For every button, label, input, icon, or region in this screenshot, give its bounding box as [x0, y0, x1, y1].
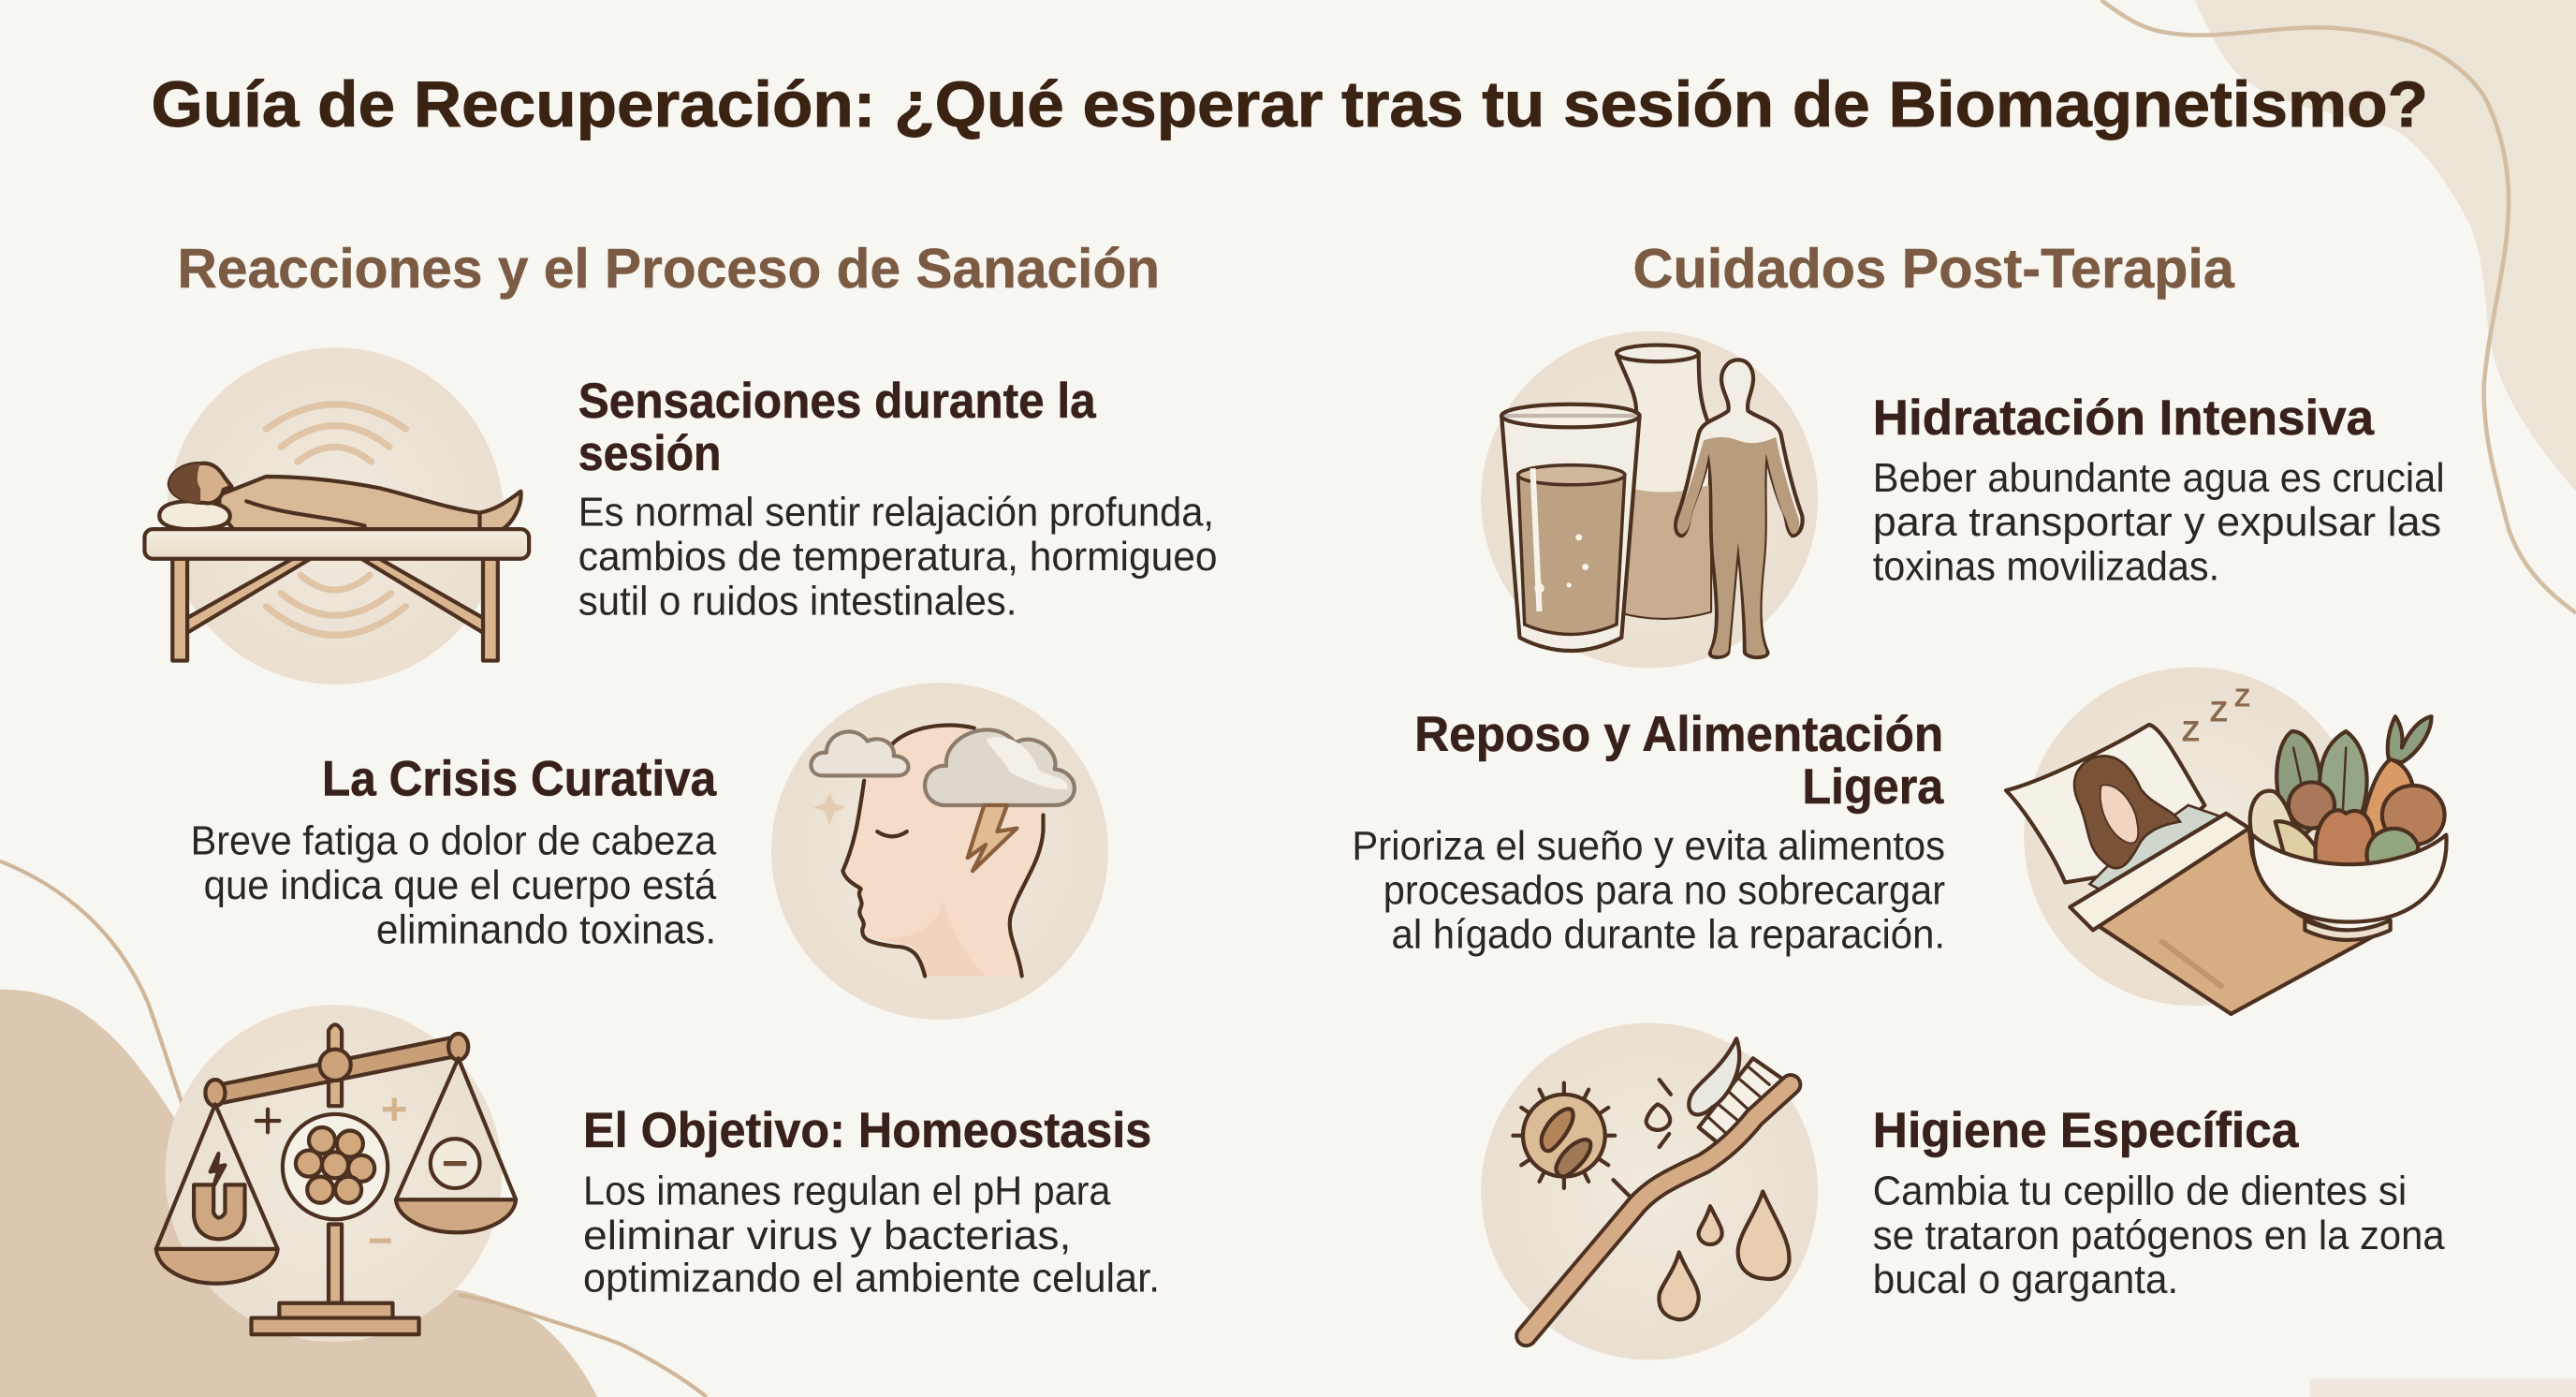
- background line: bottom centre: [459, 1295, 707, 1397]
- panel: rest and diet: [1352, 668, 2447, 1014]
- background line: top right: [2101, 0, 2576, 613]
- text block: hydration: Beber abundante agua es crucial: [1873, 455, 2445, 501]
- text block: rest and diet: Ligera: [1802, 759, 1944, 815]
- text block: sensations: Sensaciones durante la: [578, 374, 1096, 429]
- text block: homeostasis: El Objetivo: Homeostasis: [583, 1103, 1151, 1158]
- text block: sensations: sesión: [578, 426, 721, 481]
- heading: reactions column: Reacciones y el Proceso de Sanación: [178, 237, 1160, 300]
- icon: sleeping person with vegetable bowl: Z: [2210, 694, 2228, 728]
- panel: sensations: [144, 347, 1218, 684]
- text block: hygiene: Higiene Específica: [1873, 1103, 2299, 1158]
- text block: hygiene: se trataron patógenos en la zona: [1873, 1213, 2445, 1258]
- text block: rest and diet: Reposo y Alimentación: [1414, 707, 1943, 762]
- background blob: top right: [2195, 0, 2576, 492]
- panel: hydration: [1481, 331, 2445, 668]
- icon: water glass, carafe and body: [1481, 331, 1818, 668]
- text block: healing crisis: que indica que el cuerpo está: [204, 862, 717, 908]
- text block: hydration: Hidratación Intensiva: [1873, 390, 2375, 446]
- text block: rest and diet: Prioriza el sueño y evita alimentos: [1352, 823, 1945, 869]
- panel: homeostasis: [156, 1005, 1160, 1342]
- text block: homeostasis: optimizando el ambiente celular.: [583, 1255, 1160, 1301]
- text block: hygiene: bucal o garganta.: [1873, 1257, 2178, 1302]
- text block: sensations: cambios de temperatura, hormigueo: [578, 534, 1218, 580]
- background line: bottom left: [0, 861, 183, 1104]
- corner swatch: bottom right: [2310, 1379, 2576, 1397]
- text block: homeostasis: eliminar virus y bacterias,: [583, 1213, 1071, 1258]
- heading: care column: Cuidados Post-Terapia: [1633, 237, 2235, 300]
- text block: homeostasis: Los imanes regulan el pH para: [583, 1168, 1111, 1213]
- text block: hygiene: [1873, 1103, 2445, 1302]
- text block: hydration: [1873, 390, 2445, 590]
- text block: hydration: toxinas movilizadas.: [1873, 544, 2219, 590]
- text block: sensations: sutil o ruidos intestinales.: [578, 578, 1017, 624]
- title: Guía de Recuperación: ¿Qué esperar tras tu sesión de Biomagnetismo?: [151, 68, 2428, 140]
- text block: sensations: [578, 374, 1218, 624]
- icon: toothbrush with germs and drops: [1481, 1023, 1818, 1360]
- text block: healing crisis: eliminando toxinas.: [376, 906, 716, 952]
- text block: rest and diet: procesados para no sobrecargar: [1383, 867, 1945, 913]
- text block: hygiene: Cambia tu cepillo de dientes si: [1873, 1168, 2407, 1213]
- text block: healing crisis: La Crisis Curativa: [322, 751, 717, 806]
- text block: rest and diet: al hígado durante la reparación.: [1392, 912, 1945, 958]
- text block: sensations: Es normal sentir relajación profunda,: [578, 490, 1214, 536]
- text block: healing crisis: [191, 751, 717, 952]
- text block: hydration: para transportar y expulsar las: [1873, 499, 2441, 545]
- text block: homeostasis: [583, 1103, 1160, 1301]
- icon: balance scale: [156, 1005, 516, 1342]
- icon: sleeping person with vegetable bowl: Z: [2182, 714, 2200, 748]
- icon: head with storm clouds: [771, 683, 1108, 1020]
- icon: sleeping person with vegetable bowl: [2006, 668, 2447, 1014]
- text block: rest and diet: [1352, 707, 1945, 958]
- icon: sleeping person with vegetable bowl: Z: [2234, 684, 2250, 713]
- icon: massage table: [144, 347, 529, 684]
- panel: hygiene: [1481, 1023, 2445, 1360]
- text block: healing crisis: Breve fatiga o dolor de cabeza: [191, 818, 717, 864]
- background blob: bottom left: [0, 990, 598, 1397]
- panel: healing crisis: [191, 683, 1108, 1020]
